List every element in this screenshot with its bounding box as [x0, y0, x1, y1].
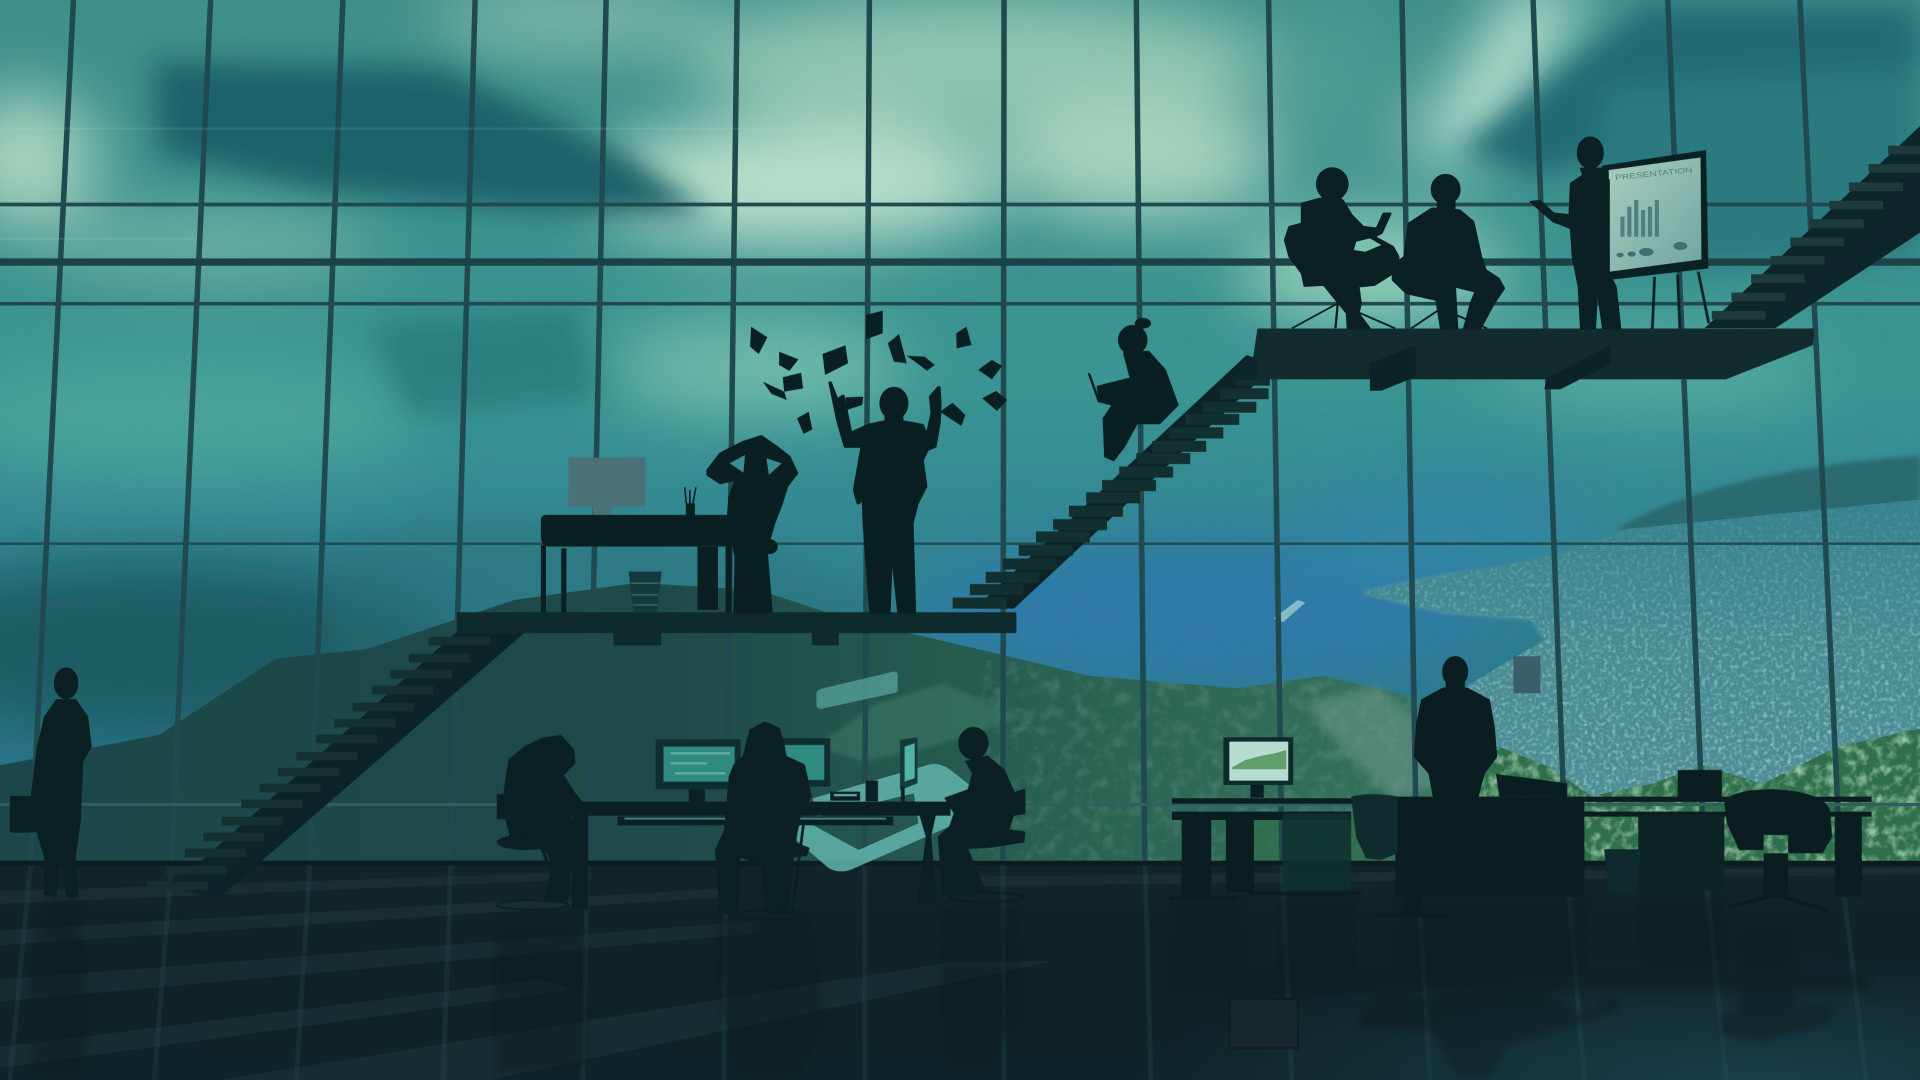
flying papers — [750, 311, 1007, 434]
stressed man holding head — [708, 436, 797, 613]
desks and cabinets — [1169, 770, 1872, 898]
middle staircase — [953, 355, 1276, 609]
ground floor silhouettes — [10, 657, 1872, 920]
seated woman with tablet — [1285, 168, 1398, 329]
trees in the foreground — [1249, 722, 1920, 863]
seated person left — [497, 736, 581, 910]
office chair left — [1351, 794, 1459, 915]
seated man — [1393, 175, 1504, 329]
desktop monitor — [568, 458, 645, 516]
presentation board — [1602, 150, 1709, 329]
waste bin — [629, 572, 662, 613]
workstation table with three people — [497, 672, 1024, 920]
sky background with clouds — [0, 0, 1920, 863]
monitors — [656, 737, 917, 803]
background mountains — [0, 517, 1469, 863]
middle floor desk and figures — [541, 311, 1177, 613]
middle platform — [457, 612, 1016, 645]
desk — [541, 515, 733, 613]
right side desks, standing man and chairs — [1169, 657, 1872, 915]
upper meeting group — [1285, 137, 1709, 329]
presentation board: PRESENTATION — [1614, 166, 1693, 182]
woman sitting on stairs with laptop — [1089, 319, 1177, 460]
reflected monitor on the floor — [1229, 999, 1298, 1048]
floor reflections of the silhouettes — [27, 900, 1870, 1075]
reflective floor — [0, 861, 1920, 1080]
upper right staircase — [1704, 126, 1920, 328]
bay and harbour — [1273, 566, 1545, 639]
table — [565, 802, 951, 910]
standing man — [1415, 657, 1496, 800]
hillside city — [1347, 456, 1920, 808]
presenter — [1531, 137, 1620, 329]
seated person centre — [716, 723, 810, 920]
pen cup — [685, 487, 696, 515]
monitor with chart — [1223, 737, 1293, 798]
upper platform — [1228, 329, 1814, 391]
office chair right — [1724, 789, 1832, 910]
glass chevron logo — [792, 672, 976, 871]
window frame grid — [0, 0, 1920, 863]
man throwing papers — [830, 383, 940, 613]
seated person right — [939, 728, 1024, 902]
standing woman with briefcase — [10, 667, 92, 898]
lower left staircase — [147, 633, 524, 899]
